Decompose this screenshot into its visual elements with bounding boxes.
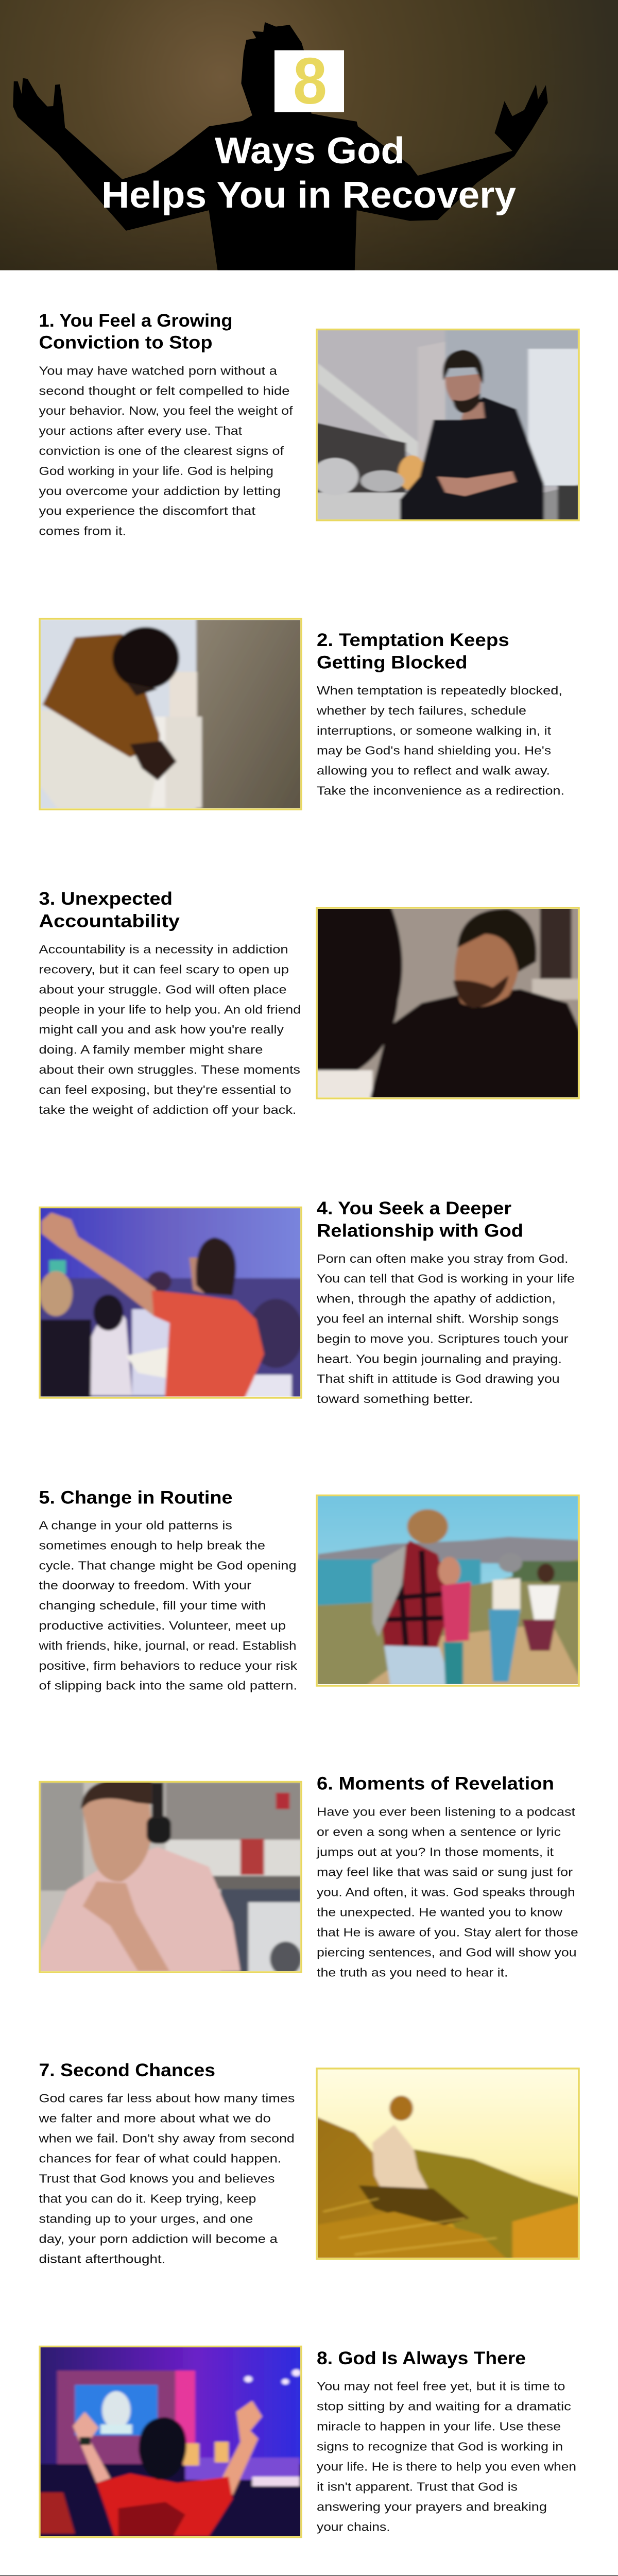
heading: section 2: 2. Temptation Keeps [317, 630, 509, 650]
text block: section 3: can feel exposing, but they're essential to [39, 1083, 291, 1096]
text block: section 7: day, your porn addiction will become a [39, 2232, 278, 2245]
text block: section 5: A change in your old patterns is [39, 1519, 232, 1532]
text block: section 5: with friends, hike, journal, or read. Establish [38, 1639, 297, 1652]
text block: section 5: sometimes enough to help break the [39, 1538, 265, 1552]
text block: section 8: You may not feel free yet, but it is time to [317, 2379, 565, 2393]
text block: section 6: piercing sentences, and God will show you [317, 1945, 577, 1959]
text block: section 1: You may have watched porn without a [39, 364, 277, 377]
panel: section 4 [31, 1198, 575, 1406]
text block: section 8: answering your prayers and breaking [317, 2500, 547, 2513]
text block: section 8: miracle to happen in your life. Use these [317, 2419, 561, 2433]
badge: number 8: 8 [293, 44, 327, 117]
text block: section 3: might call you and ask how you're really [39, 1023, 284, 1036]
text block: section 6: the unexpected. He wanted you to know [317, 1905, 562, 1919]
text block: section 8: your chains. [317, 2520, 390, 2533]
text block: section 2 [316, 684, 564, 798]
text block: section 1 [39, 364, 293, 538]
panel: section 5 [38, 1485, 587, 1692]
text block: section 3: about their own struggles. These moments [39, 1063, 300, 1076]
text block: section 7: God cares far less about how many times [39, 2092, 295, 2105]
heading: section 2: Getting Blocked [317, 652, 468, 672]
text block: section 1: you overcome your addiction by letting [39, 484, 281, 498]
text block: section 6: may feel like that was said or sung just for [317, 1865, 573, 1878]
panel: section 1 [39, 311, 587, 538]
heading: section 5: 5. Change in Routine [39, 1487, 233, 1507]
heading: section 7: 7. Second Chances [39, 2060, 215, 2080]
text block: section 8: stop sitting by and waiting for a dramatic [317, 2399, 571, 2413]
photo: person with raised hands at concert [39, 2345, 302, 2538]
text block: section 5: productive activities. Volunteer, meet up [39, 1619, 286, 1632]
text block: section 7 [38, 2092, 295, 2266]
heading: section 3 [39, 889, 180, 931]
text block: section 7: standing up to your urges, and one [39, 2212, 253, 2226]
text block: section 7: Trust that God knows you and believes [39, 2172, 274, 2185]
heading: section 1 [39, 311, 232, 352]
text block: section 6: that He is aware of you. Stay alert for those [317, 1925, 578, 1939]
text block: section 6: jumps out at you? In those moments, it [316, 1845, 554, 1858]
text block: section 6: you. And often, it was. God speaks through [317, 1885, 575, 1899]
text block: section 4: toward something better. [317, 1392, 473, 1405]
text block: section 7: that you can do it. Keep trying, keep [39, 2192, 256, 2205]
text block: section 4: heart. You begin journaling and praying. [317, 1352, 562, 1365]
text block: section 2: may be God's hand shielding you. He's [317, 744, 551, 757]
text block: section 4: when, through the apathy of addiction, [316, 1292, 556, 1306]
photo: man with headphones in kitchen [31, 1775, 307, 1978]
text block: section 4: That shift in attitude is God drawing you [317, 1372, 560, 1385]
text block: section 6: or even a song when a sentence or lyric [317, 1825, 561, 1838]
text block: section 6: Have you ever been listening to a podcast [317, 1805, 576, 1818]
heading: section 1: 1. You Feel a Growing [39, 311, 232, 331]
text block: section 1: conviction is one of the clearest signs of [39, 444, 284, 457]
panel: section 2 [31, 613, 564, 817]
heading: section 1: Conviction to Stop [39, 332, 213, 352]
panel: section 7 [38, 2060, 587, 2266]
text block: section 3: take the weight of addiction off your back. [39, 1103, 297, 1116]
text block: section 3: Accountability is a necessity in addiction [39, 943, 288, 956]
text block: section 3 [39, 943, 301, 1116]
text block: section 1: your actions after every use. That [39, 424, 243, 437]
icon: silhouette of man with raised arms [13, 22, 548, 270]
panel: footer [0, 2575, 618, 2576]
heading: section 4: Relationship with God [317, 1221, 523, 1241]
text block: section 3: about your struggle. God will often place [39, 982, 286, 996]
photo: man with head bowed [39, 618, 302, 810]
panel: section 3 [39, 889, 587, 1116]
text block: section 4: you feel an internal shift. Worship songs [317, 1312, 559, 1325]
title: Ways God [215, 130, 405, 172]
text block: section 2: Take the inconvenience as a redirection. [317, 784, 564, 798]
photo: man raising arm in worship [39, 1207, 302, 1399]
text block: section 3: people in your life to help you. An old friend [39, 1003, 301, 1016]
photo: friends hiking on a coastal trail [316, 1494, 580, 1687]
heading: section 3: 3. Unexpected [39, 889, 173, 909]
heading: section 2 [317, 630, 509, 672]
text block: section 1: you experience the discomfort that [39, 504, 256, 518]
heading: section 4: 4. You Seek a Deeper [317, 1198, 511, 1218]
text block: section 1: comes from it. [39, 524, 126, 538]
text block: section 6: the truth as you need to hear it. [317, 1965, 508, 1979]
text block: section 4: begin to move you. Scriptures touch your [317, 1332, 569, 1345]
text block: section 8: signs to recognize that God is working in [317, 2439, 563, 2453]
text block: section 5: of slipping back into the same old pattern. [39, 1679, 297, 1692]
text block: section 1: your behavior. Now, you feel the weight of [39, 404, 293, 417]
text block: section 1: God working in your life. God is helping [39, 464, 273, 478]
hero background glow [0, 0, 618, 270]
text block: section 8: your life. He is there to help you even when [317, 2460, 576, 2473]
text block: section 5: changing schedule, fill your time with [39, 1599, 266, 1612]
photo: man sitting on golden hillside [316, 2067, 580, 2260]
title [101, 130, 516, 216]
text block: section 7: we falter and more about what we do [38, 2111, 271, 2125]
heading: section 3: Accountability [39, 911, 180, 931]
text block: section 3: doing. A family member might share [39, 1043, 263, 1056]
panel: section 8 [31, 2337, 576, 2543]
text block: section 2: whether by tech failures, schedule [316, 704, 526, 717]
text block: section 7: when we fail. Don't shy away from second [38, 2132, 295, 2145]
text block: section 6 [316, 1805, 578, 1979]
text block: section 4 [316, 1252, 575, 1405]
heading: section 4 [317, 1198, 523, 1241]
heading: section 8: 8. God Is Always There [317, 2348, 526, 2368]
text block: section 5: positive, firm behaviors to reduce your risk [39, 1659, 298, 1672]
text block: section 4: You can tell that God is working in your life [317, 1272, 575, 1285]
text block: section 2: interruptions, or someone walking in, it [317, 724, 552, 737]
text block: section 1: second thought or felt compelled to hide [39, 384, 289, 397]
panel: section 6 [31, 1773, 578, 1979]
panel: hero header [0, 0, 618, 270]
text block: section 4: Porn can often make you stray from God. [317, 1252, 569, 1265]
text block: section 2: When temptation is repeatedly blocked, [317, 684, 562, 697]
text block: section 7: chances for fear of what could happen. [39, 2151, 281, 2165]
text block: section 5: cycle. That change might be God opening [39, 1558, 297, 1572]
badge: number 8 [274, 44, 344, 117]
text block: section 7: distant afterthought. [39, 2252, 165, 2266]
text block: section 5 [38, 1519, 298, 1692]
text block: section 5: the doorway to freedom. With your [39, 1579, 251, 1592]
photo: two men talking [316, 907, 580, 1099]
text block: section 8 [317, 2379, 576, 2533]
heading: section 6: 6. Moments of Revelation [317, 1773, 554, 1793]
text block: section 8: it isn't apparent. Trust that God is [317, 2480, 518, 2493]
photo: man sitting on bed [307, 324, 587, 524]
title: Helps You in Recovery [101, 175, 516, 216]
text block: section 3: recovery, but it can feel scary to open up [39, 962, 289, 976]
text block: section 2: allowing you to reflect and walk away. [317, 764, 550, 777]
